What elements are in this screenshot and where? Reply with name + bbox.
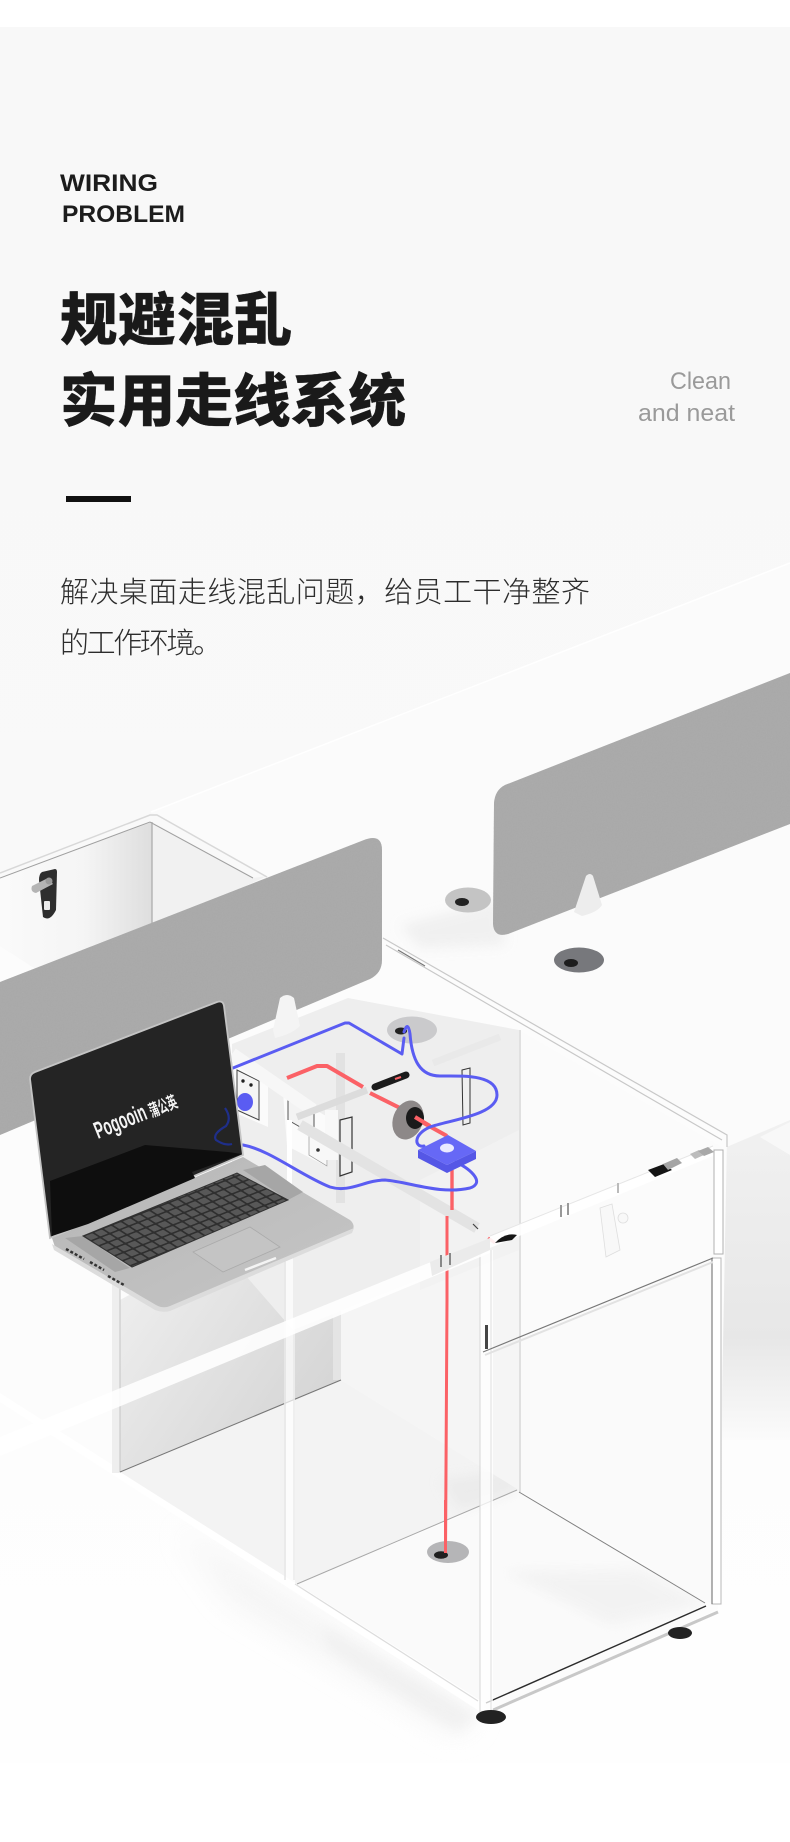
cable channel strips [232, 1037, 500, 1229]
blue knob [237, 1093, 253, 1111]
grey interior of cabinet [232, 998, 519, 1330]
left desk lower edge [0, 1393, 484, 1714]
white acrylic front bar [0, 1146, 713, 1456]
drawer lock [600, 1204, 628, 1257]
grommet front [554, 948, 604, 972]
description text: 解决桌面走线混乱问题，给员工干净整齐 [60, 576, 590, 609]
back cabinet left [0, 815, 267, 1000]
round cable pass-through [387, 1096, 430, 1144]
divider bar [66, 496, 131, 502]
side ports [66, 1249, 124, 1285]
front notch [245, 1258, 276, 1270]
screen reflection [50, 1145, 242, 1236]
interior grey column [120, 1180, 341, 1472]
laptop base [52, 1157, 354, 1309]
right felt divider panel [493, 673, 790, 935]
shadow of right panel [400, 900, 505, 948]
keyboard [83, 1173, 288, 1267]
back wall under cabinet [341, 1240, 519, 1490]
outlet one [233, 1060, 268, 1127]
drawer bottom line [483, 1258, 713, 1355]
side note: clean and neat [638, 368, 735, 427]
title: 规避混乱 [60, 289, 292, 353]
trackpad [193, 1227, 280, 1272]
right cabinet leg [712, 1150, 723, 1604]
desk scene illustration [0, 563, 790, 1735]
grommet back [445, 888, 491, 912]
floor shadow [180, 1530, 478, 1735]
laptop screen [30, 1002, 243, 1238]
heading: english wiring problem: WIRING [60, 170, 158, 197]
outlet two [283, 1092, 338, 1186]
lock on back cabinet [32, 869, 57, 918]
heading: english wiring problem [60, 170, 185, 228]
area under desk on right [722, 1120, 790, 1440]
panel holder left [273, 995, 300, 1038]
slot right [462, 1068, 470, 1125]
blue junction box [418, 1135, 476, 1173]
description text: 的工作环境。 [60, 627, 222, 660]
laptop [30, 1002, 354, 1312]
cabinet interior floor [120, 1380, 706, 1704]
cabinet bottom front rail [484, 1606, 718, 1714]
cabinet back floor outline [295, 1490, 705, 1701]
speaker grilles [65, 1165, 303, 1272]
title [60, 289, 406, 434]
grommet top of cabinet [387, 1016, 437, 1044]
back desk surface [151, 563, 790, 1149]
slot left [340, 1117, 352, 1176]
red cable [287, 1066, 495, 1553]
laptop logo: Pogooin 蒲公英 [90, 1087, 181, 1145]
blue cable reflection [215, 1108, 232, 1144]
left felt divider panel [0, 838, 382, 1135]
heading: english wiring problem: PROBLEM [62, 201, 185, 228]
black cable sleeve [375, 1075, 406, 1087]
side note: clean and neat: Clean [670, 368, 731, 395]
acrylic legs [284, 1250, 493, 1714]
description text [60, 576, 590, 660]
side note: clean and neat: and neat [638, 400, 735, 427]
front desk and cabinet base shape [0, 940, 727, 1712]
cabinet top rails and verticals [383, 938, 727, 1492]
floor grommet [427, 1500, 469, 1563]
label strip details [440, 1147, 714, 1267]
panel holder right [574, 874, 602, 916]
cabinet feet [476, 1627, 692, 1724]
title: 实用走线系统 [60, 370, 406, 434]
blue cables [233, 1023, 497, 1190]
